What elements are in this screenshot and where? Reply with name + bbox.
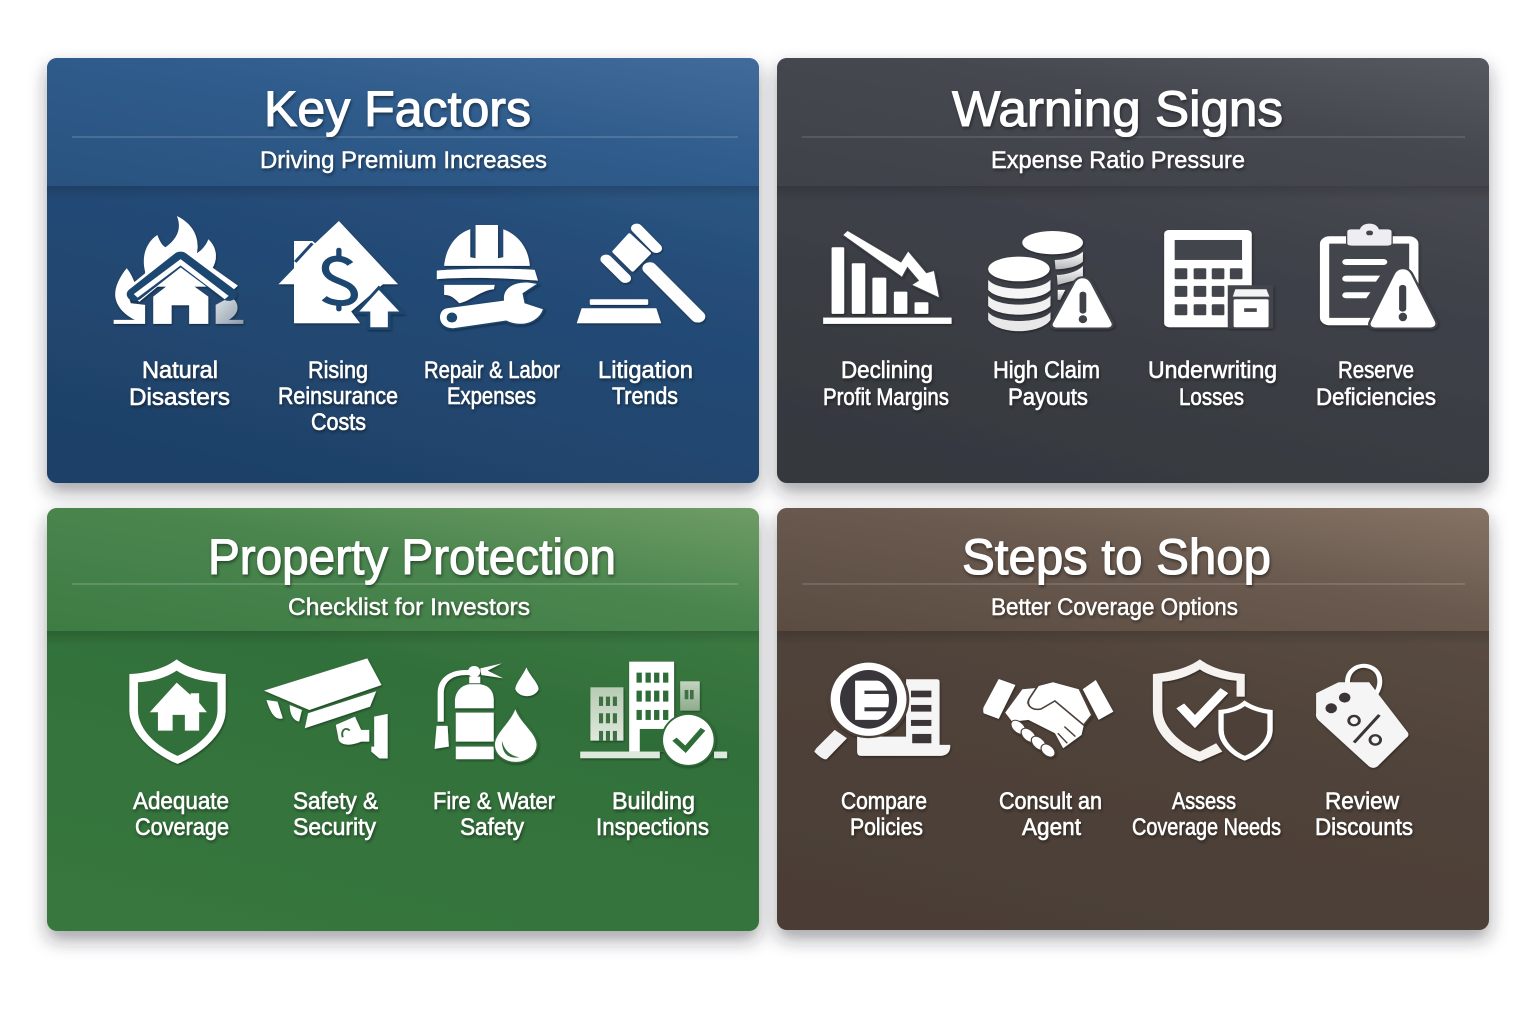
icon: fire extinguisher and water drops [435,663,539,762]
label: reserve deficiencies [1316,357,1436,411]
label: high claim payouts: Payouts [1008,384,1088,411]
heading: steps to shop: Steps to Shop [962,529,1271,585]
label: consult an agent [999,788,1102,841]
panel: steps to shop [777,508,1489,930]
icon: shield with check [1153,659,1270,762]
label: underwriting losses: Losses [1179,384,1244,411]
label: high claim payouts [993,357,1100,411]
label: high claim payouts: High Claim [993,357,1100,384]
icon: shield with house [129,659,226,764]
subheading: checklist for investors: Checklist for Investors [288,594,530,621]
label: adequate coverage [133,788,229,841]
icon: declining chart [823,231,952,324]
icon: discount tag [1316,666,1408,768]
label: fire and water safety: Safety [460,814,524,841]
label: safety and security [293,788,378,841]
label: compare policies [841,788,927,841]
heading: property protection: Property Protection [208,529,616,585]
label: consult an agent: Consult an [999,788,1102,815]
icon: house dollar rising [278,221,399,327]
label: assess coverage needs: Assess [1172,788,1236,815]
label: rising reinsurance costs: Reinsurance [278,383,398,410]
icon: handshake [983,679,1113,759]
label: assess coverage needs: Coverage Needs [1132,814,1281,841]
icon: gavel [577,228,698,323]
label: natural disasters: Disasters [129,384,230,411]
label: rising reinsurance costs: Rising [308,357,368,384]
label: compare policies: Compare [841,788,927,815]
label: declining profit margins: Declining [841,357,933,384]
icon: coins with warning [988,231,1112,331]
label: declining profit margins [823,357,949,411]
label: rising reinsurance costs: Costs [311,409,366,436]
icon: security camera [264,658,388,759]
label: repair and labor expenses: Expenses [447,383,536,410]
heading: warning signs: Warning Signs [952,81,1283,137]
label: repair and labor expenses [424,357,560,410]
label: natural disasters [129,357,230,411]
label: building inspections: Building [612,788,695,815]
subheading: driving premium increases: Driving Premium Increases [260,147,547,174]
label: safety and security: Security [293,814,376,841]
subheading: better coverage options: Better Coverage Options [991,594,1238,621]
label: reserve deficiencies: Reserve [1338,357,1414,384]
icon: buildings with check [580,662,727,765]
label: consult an agent: Agent [1022,814,1081,841]
label: repair and labor expenses: Repair & Labor [424,357,560,384]
label: underwriting losses [1148,357,1277,411]
heading: key factors: Key Factors [264,81,531,137]
subheading: expense ratio pressure: Expense Ratio Pressure [991,147,1245,174]
label: building inspections: Inspections [596,814,709,841]
label: underwriting losses: Underwriting [1148,357,1277,384]
label: assess coverage needs [1132,788,1281,841]
panel: key factors [47,58,759,483]
panel: warning signs [777,58,1489,483]
label: review discounts [1315,788,1413,841]
label: reserve deficiencies: Deficiencies [1316,384,1436,411]
icon: magnifier over policy [814,660,950,759]
icon: clipboard with warning [1325,224,1435,328]
label: natural disasters: Natural [142,357,218,384]
icon: hard hat and wrench [437,225,543,328]
label: fire and water safety: Fire & Water [433,788,555,815]
label: review discounts: Review [1325,788,1400,815]
label: declining profit margins: Profit Margins [823,384,949,411]
label: compare policies: Policies [850,814,923,841]
panel: property protection [47,508,759,931]
label: building inspections [596,788,709,841]
icon: house on fire [114,216,243,324]
label: adequate coverage: Adequate [133,788,229,815]
label: review discounts: Discounts [1315,814,1413,841]
label: fire and water safety [433,788,555,841]
label: rising reinsurance costs [278,357,398,436]
label: litigation trends: Trends [612,383,678,410]
label: litigation trends [598,357,693,410]
label: adequate coverage: Coverage [135,814,229,841]
label: safety and security: Safety & [293,788,378,815]
label: litigation trends: Litigation [598,357,693,384]
icon: calculator [1164,230,1273,329]
